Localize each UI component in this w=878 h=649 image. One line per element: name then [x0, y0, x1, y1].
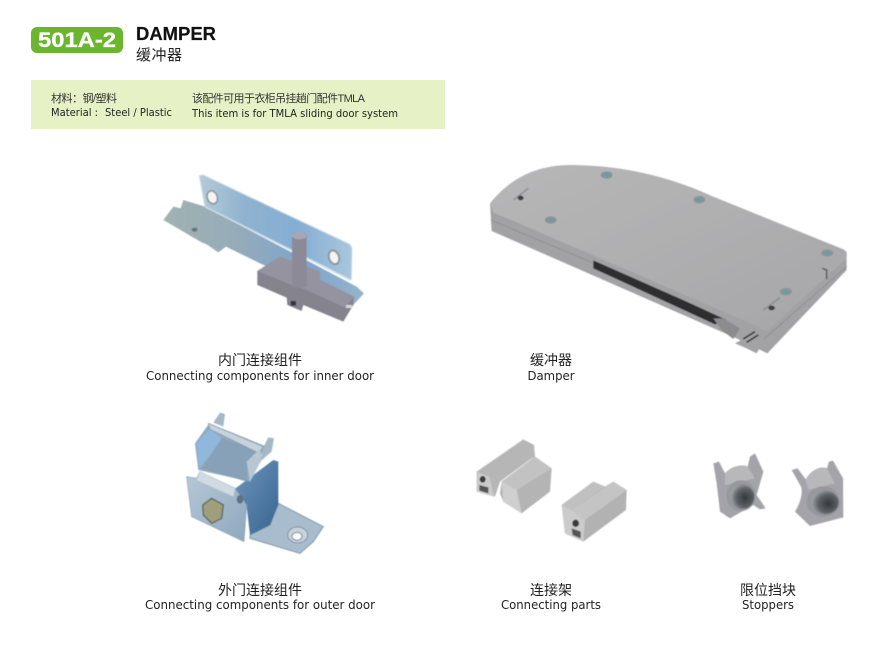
caption: stoppers: 限位挡块 — [740, 582, 796, 598]
product: damper body — [490, 165, 847, 353]
title: 缓冲器 — [136, 47, 182, 64]
caption: outer door components — [145, 582, 375, 612]
model number badge — [31, 27, 123, 53]
info panel: material and usage: Steel / Plastic — [105, 106, 172, 119]
caption: connecting parts: Connecting parts — [501, 598, 601, 612]
caption: stoppers: Stoppers — [742, 598, 794, 612]
caption: connecting parts: 连接架 — [530, 582, 572, 598]
model number badge: 501A-2 — [38, 29, 116, 52]
title — [136, 24, 216, 64]
product: outer door connecting components — [187, 413, 323, 553]
caption: connecting parts — [501, 582, 601, 612]
info panel: material and usage: Material : — [51, 106, 98, 119]
info panel: material and usage: 该配件可用于衣柜吊挂趟门配件TMLA — [192, 91, 366, 105]
caption: inner door components — [146, 352, 374, 383]
caption: damper: Damper — [528, 369, 575, 383]
caption: damper — [528, 352, 575, 383]
caption: inner door components: 内门连接组件 — [218, 352, 302, 368]
caption: outer door components: Connecting components for outer door — [145, 598, 375, 612]
caption: stoppers — [740, 582, 796, 612]
caption: inner door components: Connecting components for inner door — [146, 369, 374, 383]
product: stoppers — [713, 453, 843, 526]
title: DAMPER — [136, 24, 216, 44]
caption: damper: 缓冲器 — [530, 352, 572, 368]
info panel: material and usage: 材料：钢/塑料 — [51, 91, 117, 105]
product: inner door connecting components — [163, 175, 364, 322]
caption: outer door components: 外门连接组件 — [218, 582, 302, 598]
info panel: material and usage: This item is for TMLA sliding door system — [191, 107, 398, 120]
product: connecting parts — [477, 439, 627, 542]
info panel: material and usage — [31, 80, 445, 129]
